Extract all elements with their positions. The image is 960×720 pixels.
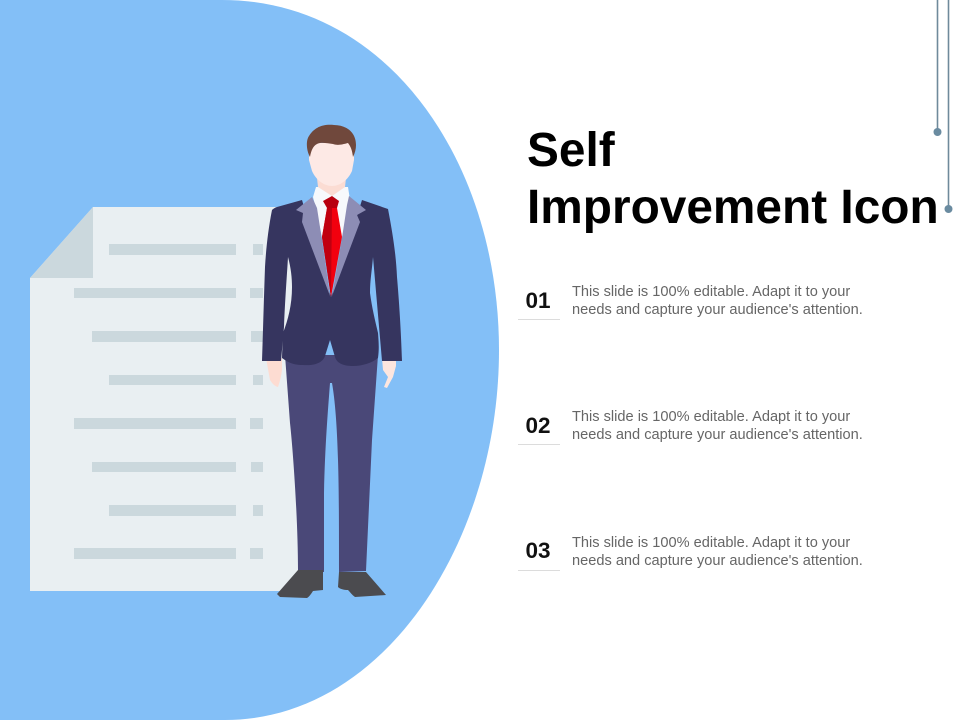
- hair: [307, 125, 356, 157]
- list item 02: needs and capture your audience's attention.: [572, 427, 863, 443]
- necktie: [322, 208, 342, 297]
- list item 03: needs and capture your audience's attention.: [572, 553, 863, 569]
- tie knot: [323, 196, 339, 208]
- list item 02: [518, 409, 863, 445]
- list item 01: This slide is 100% editable. Adapt it to your: [572, 284, 850, 300]
- businessman figure: [262, 125, 402, 598]
- jacket: [262, 200, 402, 366]
- list item 01: [518, 284, 863, 320]
- list item 03: This slide is 100% editable. Adapt it to your: [572, 535, 850, 551]
- document page with list lines: [30, 207, 298, 591]
- list item 03: [518, 535, 863, 571]
- list item 01: 01: [525, 288, 551, 313]
- title: [527, 124, 939, 234]
- right shoe: [338, 572, 386, 597]
- blue background shape: [0, 0, 499, 720]
- trousers: [285, 355, 378, 572]
- shirt collar: [313, 187, 350, 238]
- neck: [317, 178, 346, 196]
- head: [309, 143, 354, 186]
- list item 02: 02: [525, 413, 551, 438]
- list item 03: 03: [525, 538, 551, 563]
- jacket lapels: [296, 197, 330, 296]
- list item 01: needs and capture your audience's attention.: [572, 302, 863, 318]
- decorative hanging lines with dots: [934, 0, 952, 213]
- title: Improvement Icon: [527, 181, 939, 234]
- left shoe: [277, 570, 323, 598]
- title: Self: [527, 124, 615, 177]
- list item 02: This slide is 100% editable. Adapt it to your: [572, 409, 850, 425]
- hands: [266, 358, 282, 387]
